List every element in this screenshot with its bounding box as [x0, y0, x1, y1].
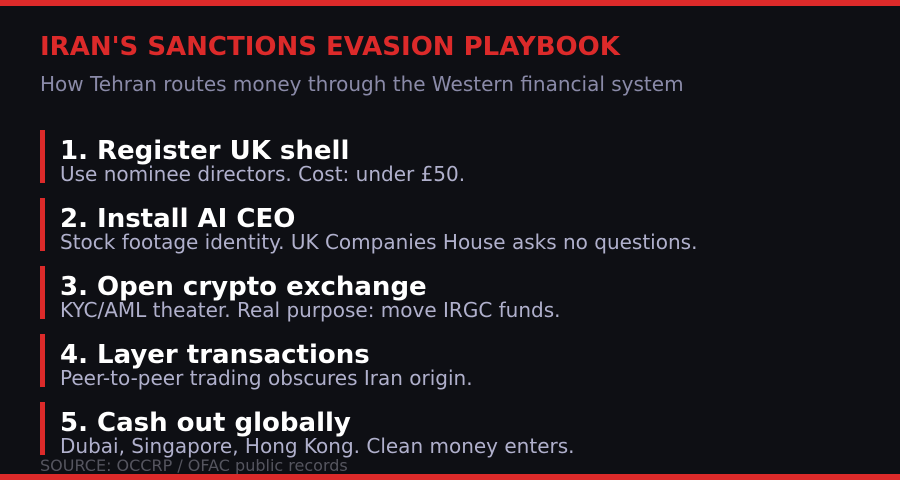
- step 4: Peer-to-peer trading obscures Iran origin.: [60, 366, 473, 390]
- step 4: 4. Layer transactions: [60, 340, 370, 370]
- step 3: 3. Open crypto exchange: [60, 272, 427, 302]
- step 5: Dubai, Singapore, Hong Kong. Clean money enters.: [60, 434, 574, 458]
- step 3: [40, 266, 561, 322]
- step 5: 5. Cash out globally: [60, 408, 351, 438]
- bottom bar: [0, 474, 900, 480]
- step 4: [40, 334, 473, 390]
- step 1: Use nominee directors. Cost: under £50.: [60, 162, 465, 186]
- step 2: 2. Install AI CEO: [60, 204, 295, 234]
- title: IRAN'S SANCTIONS EVASION PLAYBOOK: [40, 32, 621, 62]
- step 1: [40, 130, 465, 186]
- step 2: Stock footage identity. UK Companies House asks no questions.: [60, 230, 697, 254]
- top bar: [0, 0, 900, 6]
- subtitle: How Tehran routes money through the Western financial system: [40, 72, 684, 96]
- step 1: 1. Register UK shell: [60, 136, 349, 166]
- step 2: [40, 198, 697, 254]
- step 3: KYC/AML theater. Real purpose: move IRGC funds.: [60, 298, 561, 322]
- step 5: [40, 402, 574, 458]
- source note: SOURCE: OCCRP / OFAC public records: [40, 456, 348, 475]
